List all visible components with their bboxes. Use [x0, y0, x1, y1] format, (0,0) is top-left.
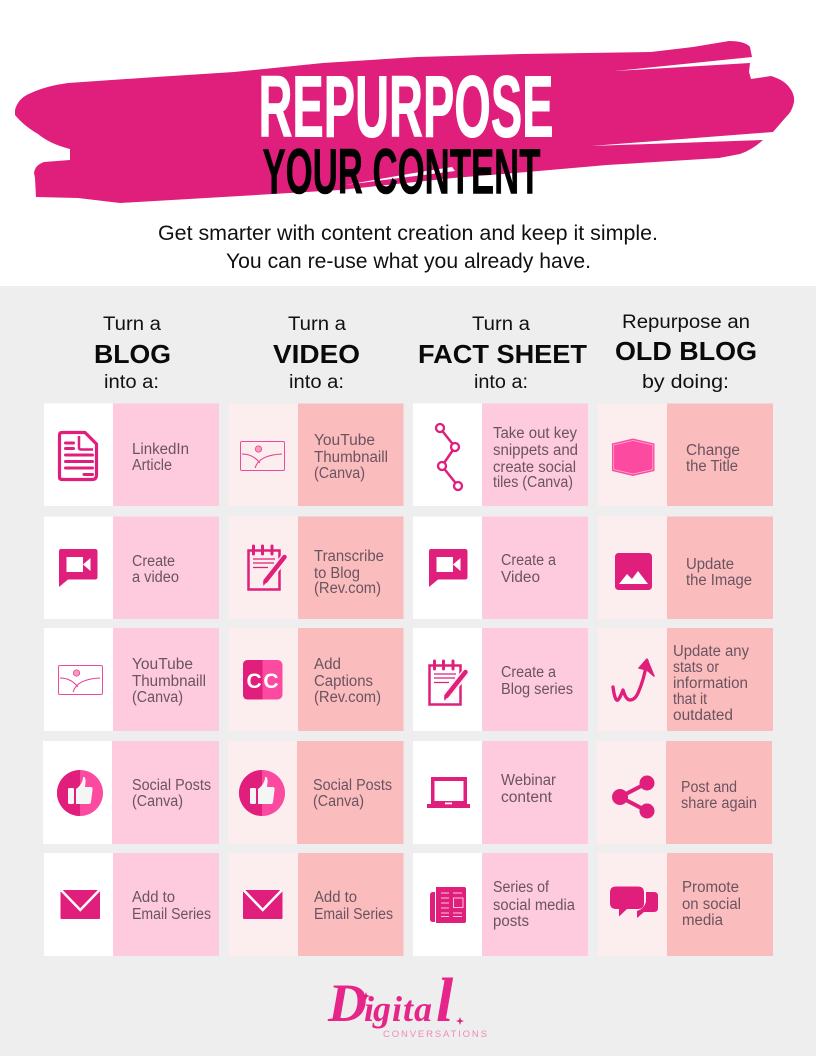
column heading: old blog — [615, 312, 757, 393]
icon: badge — [612, 438, 654, 476]
card: Social Posts blog: (Canva) — [132, 793, 183, 810]
icon: share — [612, 776, 654, 818]
card: Update the Image: the Image — [686, 572, 752, 589]
card: YouTube Thumbnail video — [229, 404, 404, 506]
title: REPURPOSE: REPURPOSE — [258, 58, 554, 156]
card: Add to Email Series video: Add to — [314, 889, 357, 906]
column heading: fact sheet: into a: — [474, 372, 528, 393]
card: Take out key snippets: tiles (Canva) — [493, 474, 573, 491]
card: Create a video — [44, 516, 219, 619]
card: Social Posts blog — [43, 741, 219, 844]
card: Add Captions: Captions — [314, 673, 373, 690]
card: YouTube Thumbnail blog: (Canva) — [132, 689, 183, 706]
card: Webinar content: content — [501, 789, 553, 806]
icon: thumbnail — [58, 666, 102, 694]
card: YouTube Thumbnail video: Thumbnaill — [314, 449, 388, 466]
card: Series of social media posts: Series of — [493, 879, 550, 896]
card: Create a video: Create — [132, 553, 175, 570]
column heading: video: Turn a — [288, 314, 346, 335]
card: Take out key snippets — [413, 404, 588, 506]
column heading: fact sheet: FACT SHEET — [418, 339, 587, 369]
icon: thumbs up — [239, 770, 285, 816]
card: Add to Email Series blog: Email Series — [132, 906, 211, 923]
card: YouTube Thumbnail video: YouTube — [314, 432, 375, 449]
card: Change the Title: the Title — [686, 458, 738, 475]
card: Create a Blog series: Blog series — [501, 681, 573, 698]
icon: closed captions — [243, 660, 282, 700]
card: Update stats: outdated — [673, 707, 733, 724]
card: Change the Title — [598, 404, 773, 506]
icon: document — [60, 432, 96, 480]
card: Update stats: Update any — [673, 643, 749, 660]
icon: thumbnail — [240, 442, 284, 470]
card: Add to Email Series blog: Add to — [132, 889, 175, 906]
card: Take out key snippets: Take out key — [493, 425, 577, 442]
logo: Digital Conversations: igita — [364, 989, 432, 1029]
card: Add Captions: Add — [314, 656, 341, 673]
column heading: blog: into a: — [104, 372, 159, 393]
column heading: old blog: Repurpose an — [622, 312, 750, 333]
logo: Digital Conversations: D — [327, 973, 367, 1033]
card: Social Posts video: (Canva) — [313, 793, 364, 810]
card: Create a Video: Video — [501, 569, 540, 586]
icon: notepad and pencil — [248, 546, 285, 590]
card: Update stats: stats or — [673, 659, 719, 676]
column heading: blog — [94, 314, 171, 393]
icon: envelope — [60, 890, 100, 919]
column heading: fact sheet: Turn a — [472, 314, 530, 335]
subtitle text — [158, 221, 658, 273]
logo: Digital Conversations — [327, 967, 487, 1040]
column heading: old blog: OLD BLOG — [615, 336, 757, 366]
card: Add to Email Series video — [229, 853, 404, 956]
card: Change the Title: Change — [686, 442, 740, 459]
background panel — [0, 286, 816, 1056]
card: Create a Video: Create a — [501, 552, 556, 569]
icon: notepad and pencil — [430, 661, 466, 704]
column heading: video: into a: — [289, 372, 344, 393]
brush stroke banner — [15, 41, 794, 203]
card: Post and share again — [597, 741, 772, 844]
card: Transcribe to Blog — [229, 516, 404, 619]
card: Create a Blog series — [413, 628, 588, 731]
column heading: fact sheet — [418, 314, 587, 393]
card: Create a Blog series: Create a — [501, 664, 556, 681]
card: Add to Email Series video: Email Series — [314, 906, 393, 923]
card: YouTube Thumbnail blog: YouTube — [132, 656, 193, 673]
card: Update stats: that it — [673, 691, 708, 708]
icon: closed captions: CC — [246, 670, 278, 693]
title: YOUR CONTENT: YOUR CONTENT — [262, 136, 540, 208]
card: YouTube Thumbnail blog — [44, 628, 219, 731]
icon: laptop — [427, 777, 470, 808]
card: Series of social media posts — [413, 853, 588, 956]
card: Post and share again: Post and — [681, 779, 737, 796]
card: YouTube Thumbnail blog: Thumbnaill — [132, 673, 206, 690]
icon: chat bubbles — [610, 886, 658, 918]
card: LinkedIn Article: LinkedIn — [132, 441, 189, 458]
card: Promote on social media: media — [682, 912, 723, 929]
card: Transcribe to Blog: Transcribe — [314, 548, 384, 565]
card: Webinar content: Webinar — [501, 772, 556, 789]
column heading: blog: BLOG — [94, 339, 171, 369]
card: Webinar content — [413, 741, 588, 844]
logo: Digital Conversations: CONVERSATIONS — [383, 1029, 487, 1040]
card: Promote on social media: on social — [682, 896, 741, 913]
column heading: video — [273, 314, 360, 393]
card: Transcribe to Blog: to Blog — [314, 565, 360, 582]
card: Add Captions: (Rev.com) — [314, 689, 381, 706]
card: Update the Image: Update — [686, 556, 734, 573]
icon: image — [615, 553, 652, 590]
card: Add to Email Series blog — [44, 853, 219, 956]
icon: video chat — [59, 549, 98, 587]
card: Social Posts video — [228, 741, 404, 844]
icon: squiggle arrow — [613, 659, 654, 700]
subtitle text: Get smarter with content creation and keep it simple. — [158, 221, 658, 245]
icon: thumbs up — [57, 770, 103, 816]
column heading: old blog: by doing: — [642, 372, 729, 393]
card: Add Captions — [229, 628, 404, 731]
card: Series of social media posts: posts — [493, 913, 529, 930]
card: Take out key snippets: create social — [493, 459, 576, 476]
column heading: video: VIDEO — [273, 339, 360, 369]
card: Update stats: information — [673, 675, 748, 692]
card: Promote on social media: Promote — [682, 879, 739, 896]
card: Transcribe to Blog: (Rev.com) — [314, 580, 381, 597]
card: LinkedIn Article: Article — [132, 457, 172, 474]
subtitle text: You can re-use what you already have. — [226, 249, 591, 273]
logo: Digital Conversations: l — [436, 967, 454, 1035]
icon: connected path — [436, 424, 462, 490]
column heading: blog: Turn a — [103, 314, 161, 335]
icon: video chat — [429, 549, 468, 587]
card: Update the Image — [598, 516, 773, 619]
card: Update stats — [598, 628, 773, 731]
card: Post and share again: share again — [681, 795, 757, 812]
card: Take out key snippets: snippets and — [493, 442, 578, 459]
card: Create a Video — [413, 516, 588, 619]
card: LinkedIn Article — [44, 404, 219, 506]
card: Promote on social media — [598, 853, 773, 956]
card: Social Posts blog: Social Posts — [132, 777, 211, 794]
icon: envelope — [243, 890, 282, 919]
card: Series of social media posts: social media — [493, 897, 575, 914]
card: YouTube Thumbnail video: (Canva) — [314, 465, 365, 482]
icon: newspaper — [430, 887, 466, 923]
card: Social Posts video: Social Posts — [313, 777, 392, 794]
card: Create a video: a video — [132, 569, 179, 586]
